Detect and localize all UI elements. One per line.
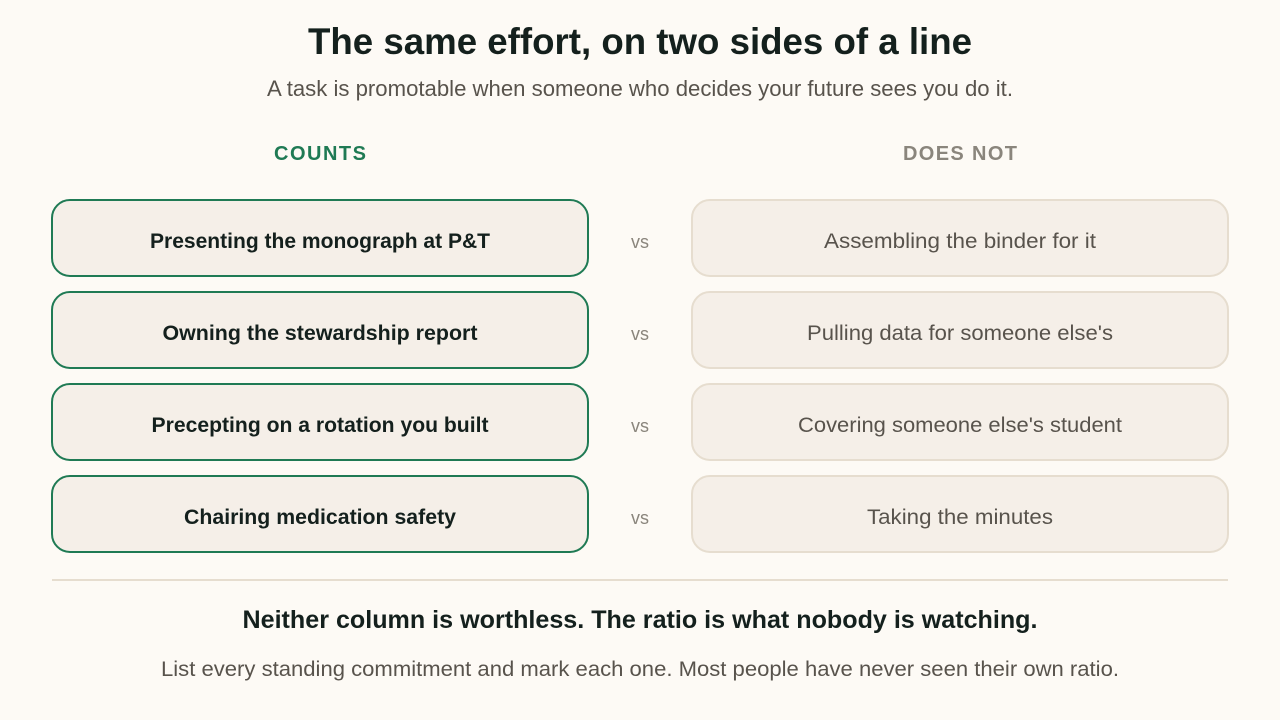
card: chairing medication safety: Chairing medication safety xyxy=(184,506,456,529)
card: taking the minutes: Taking the minutes xyxy=(867,506,1053,529)
column heading: does not: DOES NOT xyxy=(903,143,1017,165)
card: owning the stewardship report xyxy=(52,292,588,368)
subtitle: A task is promotable when someone who decides your future sees you do it. xyxy=(267,76,1013,101)
vs label: vs xyxy=(631,324,649,344)
vs label: vs xyxy=(631,416,649,436)
row 2 xyxy=(52,292,1228,368)
card: owning the stewardship report: Owning the stewardship report xyxy=(162,322,478,345)
column heading: counts: COUNTS xyxy=(274,143,366,165)
row 1 xyxy=(52,200,1228,276)
card: assembling the binder xyxy=(692,200,1228,276)
card: covering a student xyxy=(692,384,1228,460)
title: The same effort, on two sides of a line xyxy=(308,21,972,62)
card: covering a student: Covering someone else's student xyxy=(798,414,1122,437)
card: taking the minutes xyxy=(692,476,1228,552)
row 3 xyxy=(52,384,1228,460)
card: presenting the monograph: Presenting the monograph at P&T xyxy=(150,230,490,253)
card: assembling the binder: Assembling the binder for it xyxy=(824,230,1096,253)
takeaway heading: Neither column is worthless. The ratio is what nobody is watching. xyxy=(242,606,1038,634)
row 4 xyxy=(52,476,1228,552)
vs label: vs xyxy=(631,508,649,528)
card: precepting on a rotation xyxy=(52,384,588,460)
card: pulling data xyxy=(692,292,1228,368)
card: chairing medication safety xyxy=(52,476,588,552)
takeaway body: List every standing commitment and mark each one. Most people have never seen their own ratio. xyxy=(161,658,1119,681)
card: precepting on a rotation: Precepting on a rotation you built xyxy=(152,414,489,437)
vs label: vs xyxy=(631,232,649,252)
card: pulling data: Pulling data for someone else's xyxy=(807,322,1113,345)
card: presenting the monograph xyxy=(52,200,588,276)
